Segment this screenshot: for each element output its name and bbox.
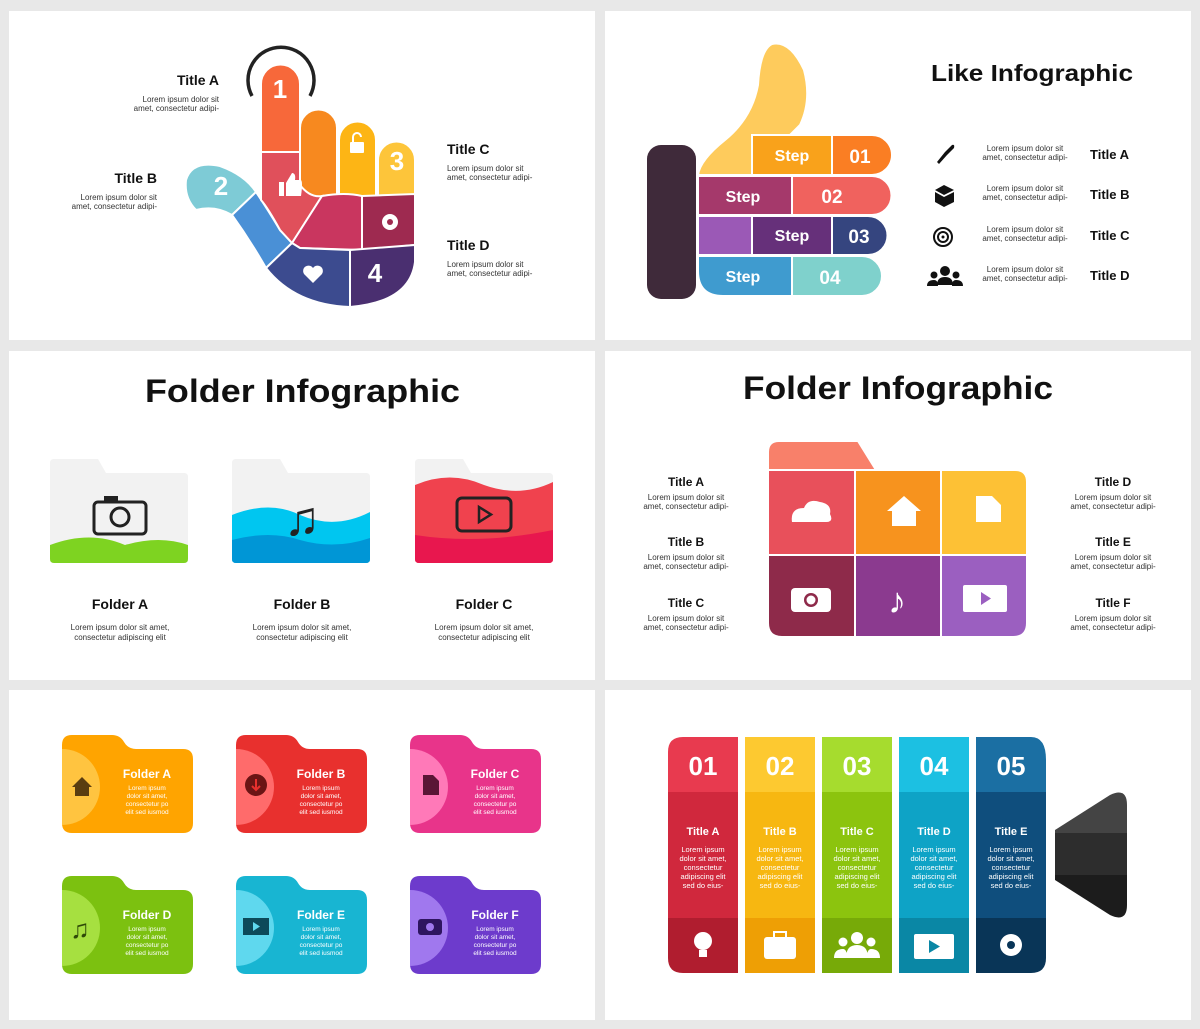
panel: hand: amet, consectetur adipi- — [72, 202, 157, 211]
panel: speaker columns: Title B — [763, 826, 797, 838]
folder B: elit sed iusmod — [299, 809, 343, 816]
panel: like infographic: Title A — [1090, 147, 1130, 162]
panel: like infographic — [605, 11, 1191, 340]
panel: speaker columns: 04 — [920, 751, 949, 781]
speaker — [1055, 793, 1127, 917]
panel: folder infographic 1: Lorem ipsum dolor sit amet, — [253, 623, 351, 632]
panel: speaker columns: Lorem ipsum — [989, 845, 1033, 854]
folder D: ♫ — [70, 914, 90, 944]
folder F: Folder F — [471, 908, 519, 922]
folder B — [232, 459, 370, 563]
panel: hand: Title C — [447, 141, 490, 157]
panel: folder infographic 1 — [9, 351, 595, 680]
panel: hand: Lorem ipsum dolor sit — [81, 193, 158, 202]
panel: speaker columns: Lorem ipsum — [835, 845, 879, 854]
panel: folder infographic 2: Title E — [1095, 535, 1131, 549]
panel: folder infographic 1: Folder B — [274, 596, 330, 612]
panel: folder infographic 2: amet, consectetur adipi- — [1070, 502, 1156, 511]
panel: speaker columns: adipiscing elit — [988, 872, 1034, 881]
panel: hand: Lorem ipsum dolor sit — [447, 164, 524, 173]
panel: hand: Title D — [447, 237, 490, 253]
panel: speaker columns: Title C — [840, 826, 874, 838]
panel: speaker columns: adipiscing elit — [911, 872, 957, 881]
panel: like infographic: 01 — [849, 147, 871, 168]
panel: colored folders — [9, 690, 595, 1020]
panel: hand: Title B — [114, 170, 157, 186]
panel: speaker columns: 03 — [843, 751, 871, 781]
folder A: Lorem ipsum — [128, 785, 166, 792]
folder A: elit sed iusmod — [125, 809, 169, 816]
folder F: Lorem ipsum — [476, 926, 514, 933]
panel: like infographic: 03 — [848, 227, 870, 248]
folder E: elit sed iusmod — [299, 950, 343, 957]
panel: folder infographic 2: Title D — [1095, 475, 1132, 489]
folder B: ♫ — [284, 493, 320, 546]
panel: folder infographic 1: Folder A — [92, 596, 148, 612]
folder E: consectetur po — [300, 942, 343, 949]
folder E — [236, 876, 367, 974]
column 4 — [899, 737, 969, 973]
panel: folder infographic 2: Title C — [668, 596, 705, 610]
panel: folder infographic 1: Lorem ipsum dolor sit amet, — [71, 623, 169, 632]
labels: Title A — [177, 72, 219, 88]
panel: like infographic: Like Infographic — [931, 60, 1133, 86]
panel: speaker columns — [605, 690, 1191, 1020]
panel: like infographic: Step — [726, 269, 761, 286]
panel: folder infographic 1: Folder Infographic — [145, 373, 460, 409]
panel: speaker columns: sed do eius- — [914, 881, 955, 890]
panel: folder infographic 2: Lorem ipsum dolor sit — [648, 553, 725, 562]
panel: speaker columns: 05 — [997, 751, 1025, 781]
folder D — [62, 876, 193, 974]
panel: folder infographic 2: Lorem ipsum dolor sit — [648, 493, 725, 502]
folder A: consectetur po — [126, 801, 169, 808]
panel: speaker columns: sed do eius- — [991, 881, 1032, 890]
panel: speaker columns: dolor sit amet, — [910, 854, 958, 863]
panel: like infographic: Lorem ipsum dolor sit — [987, 184, 1064, 193]
panel: speaker columns: consectetur — [915, 863, 954, 872]
panel: speaker columns: 01 — [689, 751, 717, 781]
folder C: elit sed iusmod — [473, 809, 517, 816]
panel: hand: 2 — [214, 171, 228, 201]
folder B: dolor sit amet, — [301, 793, 342, 800]
icons — [279, 133, 398, 283]
panel: folder infographic 2: Title F — [1095, 596, 1131, 610]
panel: speaker columns: consectetur — [992, 863, 1031, 872]
folder C: dolor sit amet, — [475, 793, 516, 800]
panel: folder infographic 2: Lorem ipsum dolor sit — [1075, 553, 1152, 562]
panel: speaker columns: dolor sit amet, — [833, 854, 881, 863]
panel: folder infographic 1: consectetur adipiscing elit — [438, 633, 531, 642]
folder C: Folder C — [471, 767, 520, 781]
folder A — [50, 459, 188, 563]
panel: like infographic: 04 — [819, 268, 841, 289]
column 5 — [976, 737, 1046, 973]
folder B: Folder B — [297, 767, 346, 781]
panel: speaker columns: consectetur — [684, 863, 723, 872]
panel: hand: amet, consectetur adipi- — [134, 104, 219, 113]
panel: folder infographic 2: amet, consectetur adipi- — [643, 502, 729, 511]
hand puzzle — [186, 65, 415, 307]
folder D: consectetur po — [126, 942, 169, 949]
folder E: Folder E — [297, 908, 345, 922]
folder C: Lorem ipsum — [476, 785, 514, 792]
panel: speaker columns: dolor sit amet, — [987, 854, 1035, 863]
panel: like infographic: Lorem ipsum dolor sit — [987, 144, 1064, 153]
folder B — [236, 735, 367, 833]
panel: like infographic: Step — [775, 228, 810, 245]
folder E: dolor sit amet, — [301, 934, 342, 941]
panel: folder infographic 2: Title B — [668, 535, 705, 549]
panel: like infographic: Title D — [1090, 268, 1130, 283]
panel: speaker columns: adipiscing elit — [680, 872, 726, 881]
panel: speaker columns: Title D — [917, 826, 951, 838]
panel: folder infographic 1: Lorem ipsum dolor sit amet, — [435, 623, 533, 632]
panel: like infographic: Step — [775, 148, 810, 165]
panel: folder infographic 2: amet, consectetur adipi- — [643, 623, 729, 632]
numbers: 1 — [273, 74, 287, 104]
panel: speaker columns: dolor sit amet, — [756, 854, 804, 863]
panel: speaker columns: sed do eius- — [683, 881, 724, 890]
panel: folder infographic 2: Lorem ipsum dolor sit — [648, 614, 725, 623]
panel: folder infographic 2: Folder Infographic — [743, 370, 1053, 406]
panel: folder infographic 2: ♪ — [888, 580, 906, 621]
folder D: Folder D — [123, 908, 172, 922]
folder F: dolor sit amet, — [475, 934, 516, 941]
folder D: Lorem ipsum — [128, 926, 166, 933]
panel: like infographic: Lorem ipsum dolor sit — [987, 225, 1064, 234]
folder B: consectetur po — [300, 801, 343, 808]
panel: folder infographic 2: amet, consectetur adipi- — [1070, 562, 1156, 571]
panel: like infographic: amet, consectetur adipi- — [982, 274, 1068, 283]
folder A — [62, 735, 193, 833]
panel: folder infographic 2: Lorem ipsum dolor sit — [1075, 493, 1152, 502]
column 1 — [668, 737, 738, 973]
panel: speaker columns: consectetur — [761, 863, 800, 872]
folder A: Folder A — [123, 767, 171, 781]
panel: like infographic: Title C — [1090, 228, 1130, 243]
panel: like infographic: amet, consectetur adipi- — [982, 193, 1068, 202]
panel: speaker columns: dolor sit amet, — [679, 854, 727, 863]
panel: folder infographic 1: consectetur adipiscing elit — [256, 633, 349, 642]
column 3 — [822, 737, 892, 973]
panel: hand: Lorem ipsum dolor sit — [447, 260, 524, 269]
panel: speaker columns: Lorem ipsum — [681, 845, 725, 854]
panel: speaker columns: adipiscing elit — [834, 872, 880, 881]
panel: speaker columns: adipiscing elit — [757, 872, 803, 881]
panel: like infographic: Lorem ipsum dolor sit — [987, 265, 1064, 274]
icons bottom — [694, 932, 1022, 959]
panel: speaker columns: Lorem ipsum — [758, 845, 802, 854]
panel: hand: amet, consectetur adipi- — [447, 269, 533, 278]
folder F — [410, 876, 541, 974]
column 2 — [745, 737, 815, 973]
panel: speaker columns: consectetur — [838, 863, 877, 872]
panel: like infographic: amet, consectetur adipi- — [982, 153, 1068, 162]
panel: like infographic: amet, consectetur adipi- — [982, 234, 1068, 243]
panel: speaker columns: Title A — [686, 826, 720, 838]
panel: folder infographic 1: consectetur adipiscing elit — [74, 633, 167, 642]
folder F: elit sed iusmod — [473, 950, 517, 957]
panel: hand: Lorem ipsum dolor sit — [143, 95, 220, 104]
panel: like infographic: Step — [726, 189, 761, 206]
panel: speaker columns: sed do eius- — [760, 881, 801, 890]
folder C — [410, 735, 541, 833]
panel: folder infographic 2: amet, consectetur adipi- — [643, 562, 729, 571]
arc around finger — [248, 47, 314, 96]
folder A: dolor sit amet, — [127, 793, 168, 800]
panel: speaker columns: 02 — [766, 751, 794, 781]
panel: speaker columns: Title E — [995, 826, 1027, 838]
folder B: Lorem ipsum — [302, 785, 340, 792]
panel: folder infographic 2 — [605, 351, 1191, 680]
panel: folder infographic 1: Folder C — [456, 596, 512, 612]
panel: like infographic: 02 — [821, 187, 843, 208]
panel: folder infographic 2: Lorem ipsum dolor sit — [1075, 614, 1152, 623]
panel: hand: 4 — [368, 258, 383, 288]
panel: like infographic: Title B — [1090, 187, 1130, 202]
folder E: Lorem ipsum — [302, 926, 340, 933]
folder D: elit sed iusmod — [125, 950, 169, 957]
folder C: consectetur po — [474, 801, 517, 808]
folder D: dolor sit amet, — [127, 934, 168, 941]
panel: hand — [9, 11, 595, 340]
panel: folder infographic 2: amet, consectetur adipi- — [1070, 623, 1156, 632]
folder F: consectetur po — [474, 942, 517, 949]
panel: speaker columns: sed do eius- — [837, 881, 878, 890]
panel: speaker columns: Lorem ipsum — [912, 845, 956, 854]
panel: hand: amet, consectetur adipi- — [447, 173, 533, 182]
panel: hand: 3 — [390, 146, 404, 176]
panel: folder infographic 2: Title A — [668, 475, 704, 489]
folder C — [415, 459, 553, 563]
